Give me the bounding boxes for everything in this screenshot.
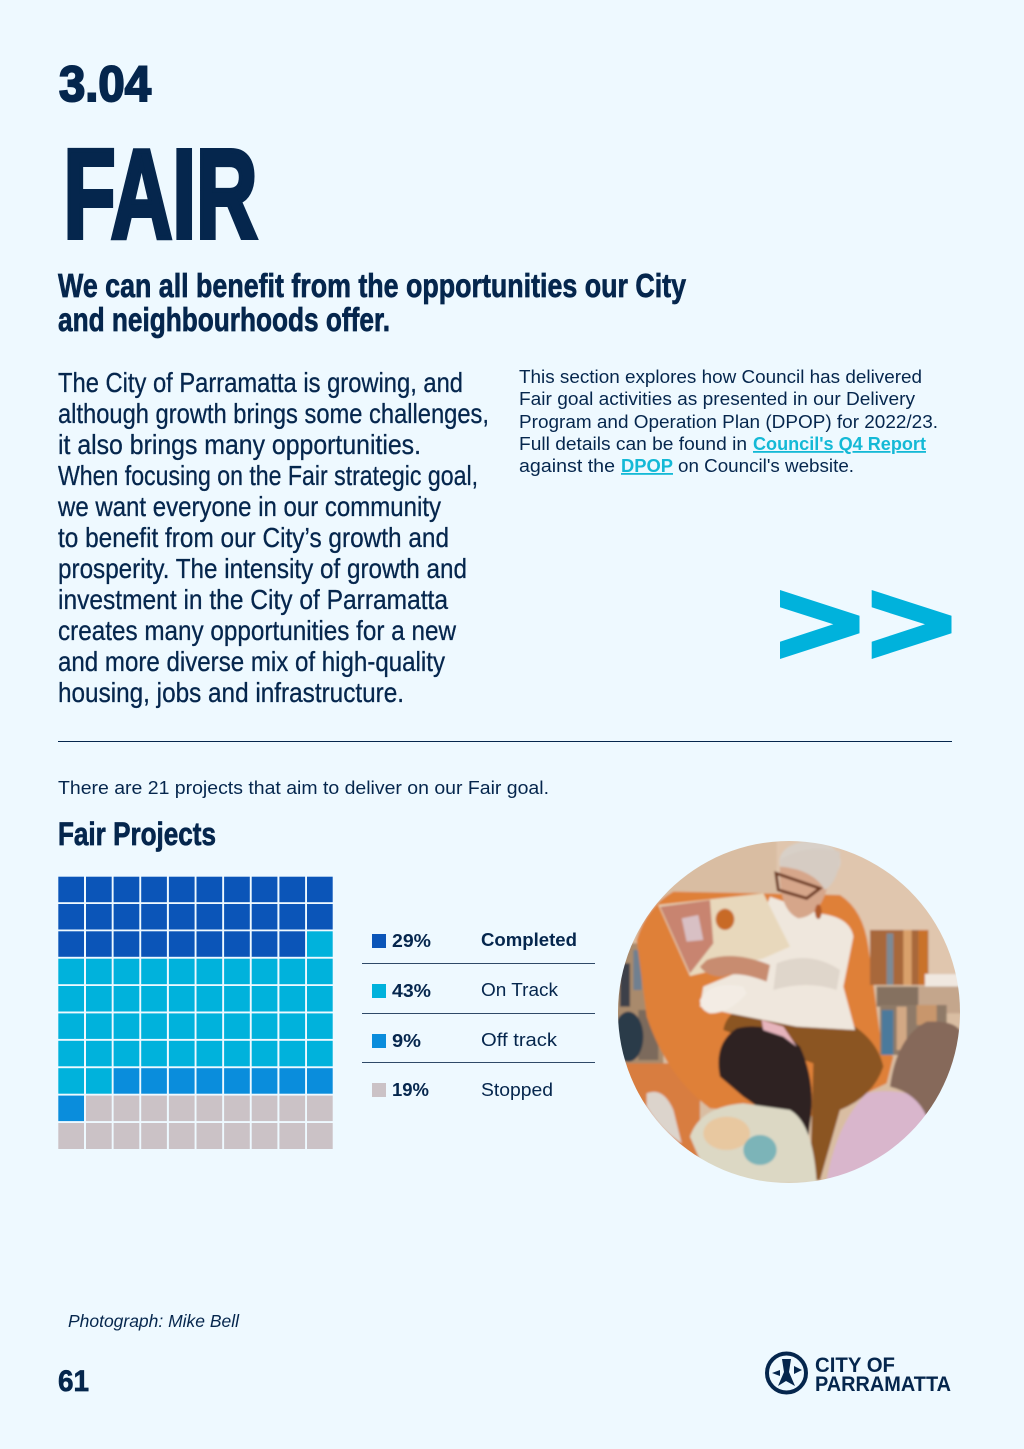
- projects intro text: There are 21 projects that aim to deliver on our Fair goal.: [58, 777, 549, 798]
- legend row: stopped: [372, 1080, 553, 1100]
- photo: woman reading to children: [610, 830, 970, 1190]
- intro note with links: Council's Q4 Report: [753, 434, 926, 454]
- legend row: stopped: Stopped: [481, 1080, 553, 1100]
- intro note with links: on Council's website.: [678, 456, 854, 476]
- logo: City of Parramatta: [767, 1353, 951, 1396]
- icon: city crest: [767, 1354, 806, 1392]
- intro note with links: DPOP: [621, 456, 673, 476]
- intro note with links: Program and Operation Plan (DPOP) for 2022/23.: [519, 412, 938, 432]
- logo: City of Parramatta: PARRAMATTA: [815, 1372, 951, 1396]
- body paragraph: housing, jobs and infrastructure.: [58, 677, 404, 708]
- arrows: [780, 590, 952, 659]
- intro note with links: This section explores how Council has delivered: [519, 367, 922, 387]
- legend row: off track: Off track: [481, 1030, 558, 1050]
- subheading: [58, 267, 687, 338]
- intro note with links: against the: [519, 456, 615, 476]
- photo credit: Photograph: Mike Bell: [68, 1311, 240, 1331]
- intro note with links: Fair goal activities as presented in our Delivery: [519, 389, 915, 409]
- waffle chart: [58, 877, 333, 1149]
- legend row: on track: 43%: [392, 981, 431, 1001]
- body paragraph: prosperity. The intensity of growth and: [58, 553, 467, 584]
- legend row: completed: [372, 930, 577, 951]
- subheading: and neighbourhoods offer.: [58, 301, 390, 338]
- legend row: on track: On Track: [481, 980, 559, 1000]
- section number: 3.04: [59, 56, 151, 112]
- legend: [362, 930, 595, 1100]
- body paragraph: When focusing on the Fair strategic goal,: [58, 460, 478, 491]
- legend row: stopped: 19%: [392, 1080, 429, 1100]
- body paragraph: and more diverse mix of high-quality: [58, 646, 445, 677]
- intro note with links: [519, 367, 938, 476]
- intro note with links: Full details can be found in: [519, 434, 747, 454]
- subheading: We can all benefit from the opportunities our City: [58, 267, 687, 304]
- body paragraph: it also brings many opportunities.: [58, 429, 421, 460]
- body paragraph: creates many opportunities for a new: [58, 615, 457, 646]
- legend row: off track: [372, 1030, 558, 1051]
- body paragraph: we want everyone in our community: [57, 491, 441, 522]
- chart heading: Fair Projects: [58, 816, 216, 852]
- legend row: on track: [372, 980, 559, 1001]
- body paragraph: to benefit from our City’s growth and: [58, 522, 449, 553]
- title: FAIR: [64, 124, 258, 264]
- body paragraph: although growth brings some challenges,: [58, 398, 489, 429]
- legend row: off track: 9%: [392, 1031, 421, 1051]
- body paragraph: investment in the City of Parramatta: [58, 584, 448, 615]
- legend row: completed: Completed: [481, 930, 577, 950]
- legend row: completed: 29%: [392, 931, 431, 951]
- body paragraph: [57, 367, 489, 708]
- page number: 61: [58, 1365, 89, 1398]
- logo: City of Parramatta: CITY OF: [815, 1353, 895, 1377]
- body paragraph: The City of Parramatta is growing, and: [58, 367, 463, 398]
